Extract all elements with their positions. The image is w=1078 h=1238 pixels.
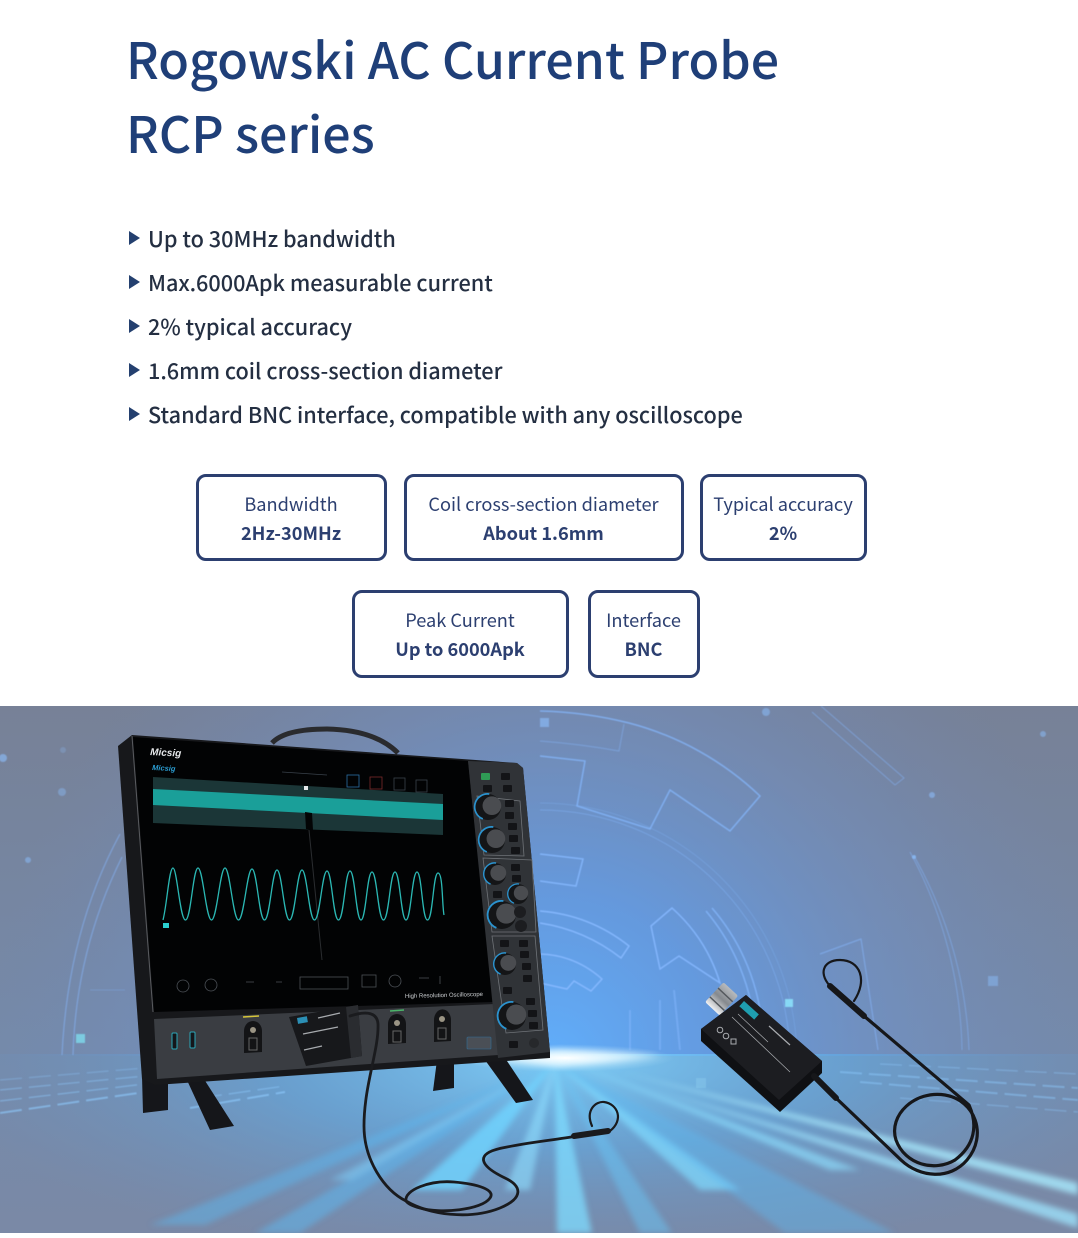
background: floor dashes xyxy=(0,1064,1078,1113)
overview waveform band xyxy=(153,777,443,835)
spec card: accuracy: 2% xyxy=(769,520,797,546)
feature list: 2% typical accuracy xyxy=(148,311,352,342)
spec card: coil diameter xyxy=(404,474,684,561)
background: circuit arcs xyxy=(62,706,969,1056)
feature list xyxy=(129,223,743,430)
scope screen xyxy=(133,737,493,1012)
scope body xyxy=(118,735,550,1085)
spec card: interface: BNC xyxy=(625,636,662,662)
oscilloscope xyxy=(118,729,550,1130)
spec card: bandwidth: 2Hz-30MHz xyxy=(241,520,341,546)
scope bezel edge xyxy=(132,736,153,1012)
brand label: Micsig xyxy=(150,747,182,760)
spec card: coil diameter: Coil cross-section diameter xyxy=(428,491,659,517)
module markings xyxy=(717,1014,790,1072)
spec card: bandwidth: Bandwidth xyxy=(244,491,338,517)
teal waveform xyxy=(153,789,443,820)
module body xyxy=(701,995,822,1112)
spec card: accuracy xyxy=(700,474,867,561)
spec card: peak current: Up to 6000Apk xyxy=(395,636,525,662)
model caption: High Resolution Oscilloscope xyxy=(405,992,484,1000)
left probe cable xyxy=(350,1013,618,1215)
feature list: 1.6mm coil cross-section diameter xyxy=(148,355,502,386)
feature: interface xyxy=(129,399,743,430)
spec card: coil diameter: About 1.6mm xyxy=(483,520,604,546)
control knobs xyxy=(475,794,528,1030)
feature: accuracy xyxy=(129,311,352,342)
feature: measurable current xyxy=(129,267,493,298)
background: horizon glow xyxy=(455,1044,675,1072)
spec card: interface xyxy=(588,590,700,678)
spec card: peak current: Peak Current xyxy=(405,607,515,633)
scope feet xyxy=(142,1058,533,1130)
feature list: Standard BNC interface, compatible with any oscilloscope xyxy=(148,399,743,430)
spec card: bandwidth xyxy=(196,474,387,561)
background: light rays xyxy=(150,1050,1078,1233)
control group frames xyxy=(477,796,543,1033)
screen toolbar xyxy=(282,772,427,792)
spec card: interface: Interface xyxy=(606,607,681,633)
mini probe box on scope xyxy=(289,1005,362,1066)
product photo panel xyxy=(0,706,1078,1233)
feature list: Max.6000Apk measurable current xyxy=(148,267,493,298)
spec card: accuracy: Typical accuracy xyxy=(713,491,853,517)
model badge xyxy=(467,1037,491,1049)
module brand badge xyxy=(739,1001,759,1020)
left clip xyxy=(574,1131,608,1136)
USB ports xyxy=(172,1032,195,1049)
background: blue tech gradient xyxy=(0,706,1078,1233)
right probe module xyxy=(701,960,977,1174)
screen brand label: Micsig xyxy=(152,763,176,773)
trigger marker line xyxy=(304,786,322,960)
title line 2: RCP series xyxy=(126,96,375,168)
waveform channel marker xyxy=(163,923,169,928)
feature list: Up to 30MHz bandwidth xyxy=(148,223,396,254)
title xyxy=(126,22,779,168)
background: light dots xyxy=(0,708,1046,1088)
BNC ports xyxy=(243,1009,451,1053)
screen bottom menu xyxy=(177,975,440,992)
sine waveform xyxy=(163,868,444,920)
left coil loop xyxy=(590,1102,618,1131)
control panel xyxy=(468,761,550,1058)
feature: bandwidth xyxy=(129,223,396,254)
background: floor glow xyxy=(0,1054,1078,1233)
front connector panel xyxy=(154,1004,498,1079)
control buttons xyxy=(481,773,539,1048)
title line 1: Rogowski AC Current Probe xyxy=(126,22,779,94)
module cable and coil xyxy=(814,960,977,1174)
module top face xyxy=(701,995,822,1100)
feature: coil diameter xyxy=(129,355,502,386)
BNC connector xyxy=(705,982,738,1016)
scope handle xyxy=(272,729,398,753)
spec card: peak current xyxy=(352,590,569,678)
